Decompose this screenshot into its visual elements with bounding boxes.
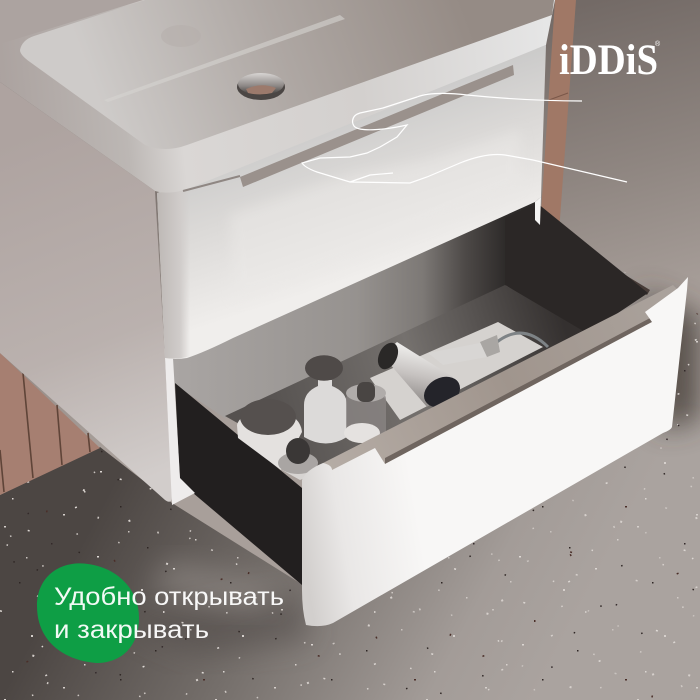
sink drain	[237, 73, 285, 100]
caption: и закрывать	[54, 616, 209, 644]
upper drawer front	[157, 45, 546, 359]
caption	[54, 583, 284, 644]
lower drawer front	[302, 277, 688, 626]
sink	[0, 0, 555, 193]
green blob	[37, 563, 139, 663]
hair dryer	[374, 333, 548, 413]
bottle: tall white	[304, 355, 347, 444]
open drawer cavity	[170, 198, 648, 585]
floor	[0, 232, 700, 700]
drawer floor	[225, 285, 590, 475]
jar: large white	[237, 399, 302, 470]
tiled wall top left	[0, 0, 145, 46]
caption: Удобно открывать	[54, 583, 284, 611]
overflow hole	[161, 25, 201, 47]
drawer handle strip upper	[183, 65, 514, 191]
back wall	[170, 198, 540, 418]
dark panel	[505, 203, 648, 335]
motion lines	[302, 93, 627, 183]
bottles	[237, 355, 386, 480]
small glass jar	[278, 438, 318, 480]
wood top edge	[323, 285, 680, 472]
glass	[344, 382, 386, 443]
sink channel highlight	[104, 15, 345, 102]
white cabinet front strip	[165, 358, 195, 505]
dark drawer side	[175, 383, 302, 585]
wall panel: pink slats right	[540, 0, 576, 232]
wood shadow edge	[385, 317, 652, 464]
logo: iDDiS	[559, 37, 658, 84]
towel	[370, 322, 543, 420]
cabinet side panel	[0, 82, 172, 502]
logo: ®	[655, 40, 661, 48]
white front panel	[302, 277, 688, 626]
wall panel: pink slats left	[0, 353, 100, 495]
